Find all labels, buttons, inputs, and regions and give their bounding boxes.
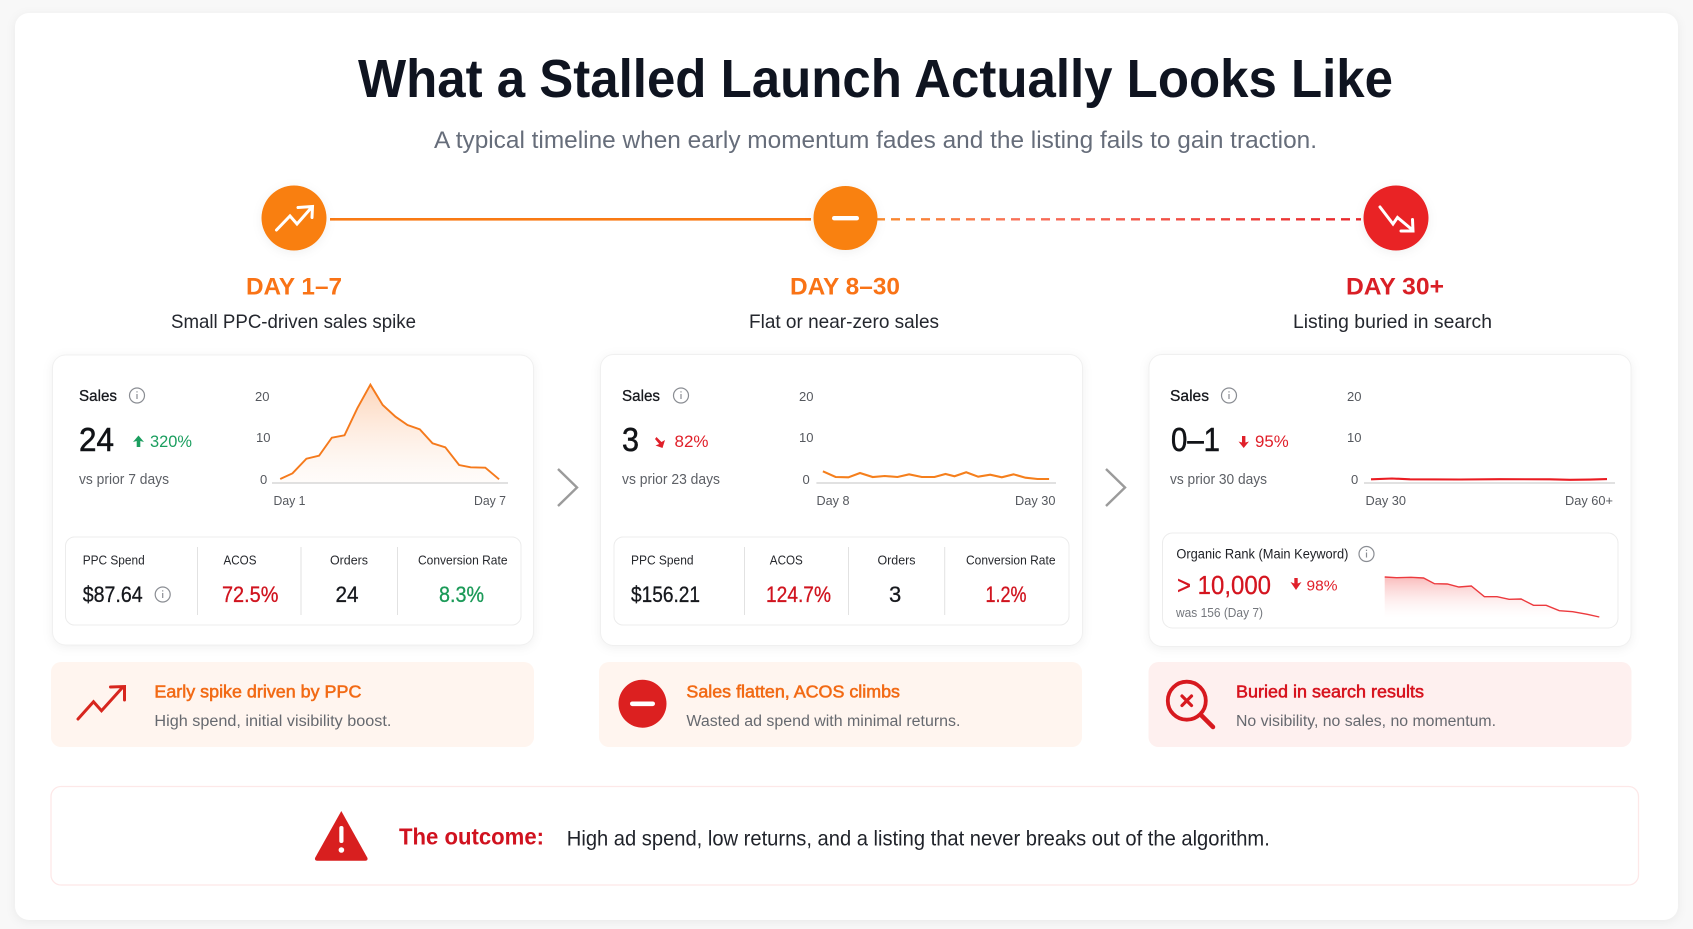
sales chart: near zero: 10 [1347, 430, 1361, 445]
sales chart: spike [255, 385, 508, 508]
sales value: 24 [79, 421, 114, 458]
sales chart: flat: 20 [799, 389, 813, 404]
sales chart: flat: 10 [799, 430, 813, 445]
subtitle: A typical timeline when early momentum fades and the listing fails to gain traction. [434, 127, 1317, 154]
outcome text: High ad spend, low returns, and a listing that never breaks out of the algorithm. [567, 826, 1270, 850]
change down 95%: 95% [1255, 433, 1289, 451]
solid connector [330, 218, 811, 221]
sales chart: spike: 0 [260, 472, 267, 487]
organic rank title: Organic Rank (Main Keyword) [1176, 546, 1348, 562]
metric strip: 24 [336, 582, 358, 607]
arrow: to day 30+ [1106, 469, 1125, 506]
change down 95% [1238, 433, 1289, 451]
icon: info [674, 388, 688, 403]
icon: warning triangle [315, 811, 368, 861]
icon: falling trend node [1364, 186, 1428, 250]
metric strip: PPC Spend [83, 552, 145, 568]
callout text: High spend, initial visibility boost. [154, 713, 391, 730]
sales chart: near zero: 20 [1347, 389, 1361, 404]
callout heading: Buried in search results [1236, 682, 1424, 702]
stage label: day 8-30: Flat or near-zero sales [749, 311, 939, 333]
change down 98%: 98% [1306, 578, 1338, 594]
previous rank note: was 156 (Day 7) [1175, 605, 1263, 620]
sales label: Sales [1170, 388, 1209, 405]
sales chart: near zero: 0 [1351, 472, 1358, 487]
icon: flat node [814, 186, 878, 250]
comparison note: vs prior 30 days [1170, 472, 1267, 488]
icon: info [130, 388, 144, 403]
sales chart: flat: Day 8 [816, 493, 850, 508]
sales chart: spike: 10 [256, 430, 270, 445]
panel: day 1-7 metrics [52, 355, 534, 645]
sales value: 0–1 [1171, 421, 1220, 458]
comparison note: vs prior 7 days [79, 472, 169, 488]
callout: sales flatten [599, 662, 1082, 747]
callout: buried in search [1148, 662, 1632, 747]
metric strip: $156.21 [631, 582, 700, 607]
panel: day 8-30 metrics [600, 354, 1082, 646]
stage label: day 8-30 [749, 273, 939, 333]
metric strip: Conversion Rate [966, 552, 1056, 568]
icon: rising trend node [262, 186, 326, 250]
callout text: No visibility, no sales, no momentum. [1236, 713, 1496, 730]
callout: early spike [51, 662, 534, 747]
rank decline chart [1385, 577, 1599, 618]
change down 82%: 82% [674, 433, 709, 451]
metric strip: 72.5% [222, 582, 278, 607]
icon: trend up [78, 686, 124, 719]
stage label: day 30+: Listing buried in search [1293, 311, 1492, 333]
metric strip: ACOS [770, 552, 803, 568]
metric strip: PPC Spend [631, 552, 694, 568]
sales chart: flat [799, 389, 1056, 508]
metric strip: 1.2% [986, 582, 1026, 607]
sales label: Sales [79, 388, 117, 405]
sales chart: near zero: Day 60+ [1565, 493, 1613, 508]
metric strip: 8.3% [439, 582, 484, 607]
arrow: to day 8-30 [558, 469, 577, 506]
sales chart: near zero [1347, 389, 1615, 508]
sales chart: near zero: Day 30 [1366, 493, 1406, 508]
metric strip: Orders [878, 552, 916, 568]
outcome banner [51, 786, 1638, 885]
metric strip: ACOS [224, 552, 257, 568]
change down 98% [1290, 578, 1338, 594]
metric strip: Orders [330, 552, 368, 568]
metric strip: 124.7% [766, 582, 831, 607]
panel: day 30+ metrics [1149, 354, 1631, 646]
stage label: day 1-7 [171, 273, 416, 333]
sales chart: spike: Day 7 [474, 493, 506, 508]
icon: info [1359, 546, 1374, 562]
timeline [171, 186, 1492, 333]
stage label: day 30+: DAY 30+ [1346, 273, 1444, 300]
change up 320%: 320% [150, 433, 192, 451]
stage label: day 1-7: DAY 1–7 [246, 273, 342, 300]
metric strip [614, 537, 1069, 625]
metric strip: $87.64 [83, 582, 143, 607]
sales chart: flat: Day 30 [1015, 493, 1056, 508]
sales chart: spike: Day 1 [274, 493, 306, 508]
title: What a Stalled Launch Actually Looks Like [358, 49, 1393, 109]
icon: info [1222, 388, 1236, 403]
callout heading: Sales flatten, ACOS climbs [686, 682, 900, 702]
icon: minus circle [618, 680, 666, 728]
stage label: day 30+ [1293, 273, 1492, 333]
comparison note: vs prior 23 days [622, 472, 720, 488]
metric strip: Conversion Rate [418, 552, 508, 568]
rank value: > 10,000 [1177, 572, 1271, 600]
sales chart: spike: 20 [255, 389, 269, 404]
stage label: day 8-30: DAY 8–30 [790, 273, 900, 300]
organic rank box [1162, 533, 1618, 628]
sales label: Sales [622, 388, 660, 405]
stage label: day 1-7: Small PPC-driven sales spike [171, 311, 416, 333]
outcome label: The outcome: [399, 824, 544, 850]
dashed connector [876, 218, 1361, 221]
sales value: 3 [622, 421, 639, 458]
callout heading: Early spike driven by PPC [154, 682, 361, 702]
change down 82% [655, 433, 709, 451]
metric strip: 3 [889, 582, 901, 607]
icon: magnifier with x [1168, 682, 1213, 727]
callout text: Wasted ad spend with minimal returns. [686, 713, 960, 730]
metric strip [66, 537, 521, 625]
sales chart: flat: 0 [802, 472, 810, 487]
